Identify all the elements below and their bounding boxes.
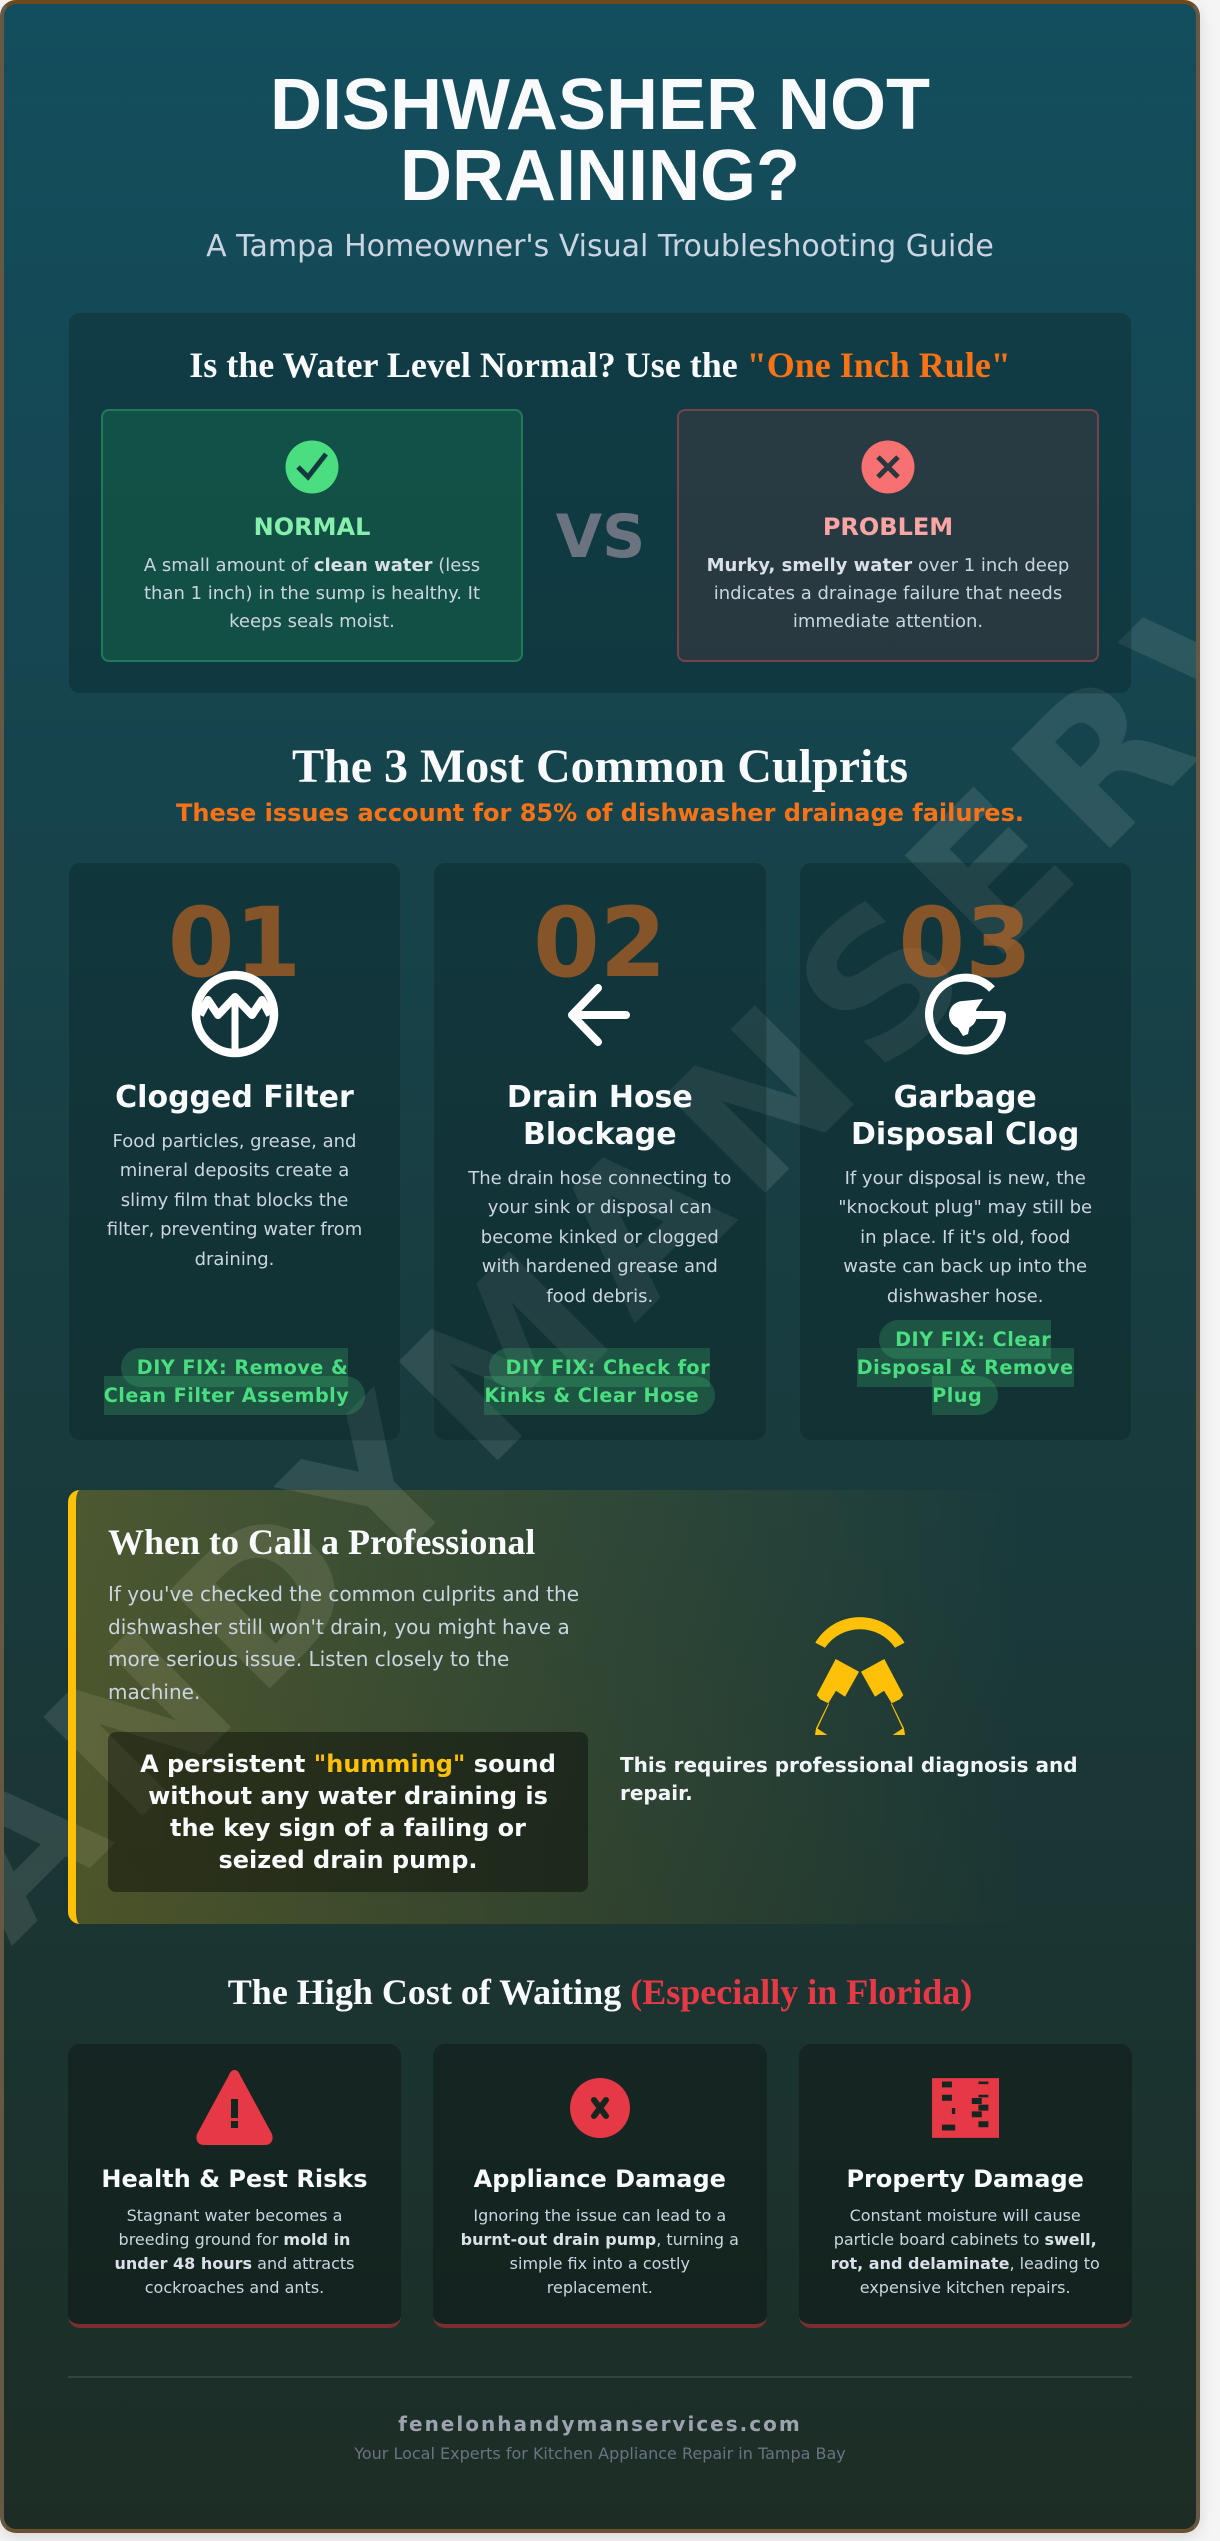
title: appliance: Appliance Damage: [474, 2165, 726, 2193]
text: professional diagnosis: repair.: [620, 1780, 693, 1804]
text: professional: dishwasher still won't drain, you might have a: [108, 1615, 570, 1639]
card: health risks: [68, 2044, 401, 2328]
diy fix: disposal: Plug: [932, 1384, 982, 1407]
callout text: A persistent "humming" sound: [140, 1750, 556, 1778]
text: clogged filter: [107, 1131, 362, 1270]
heading: one inch rule: Is the Water Level Normal? Use the "One Inch Rule": [189, 344, 1011, 384]
text: appliance: simple fix into a costly: [510, 2254, 690, 2273]
text: garbage disposal: [838, 1168, 1092, 1307]
text: appliance: Ignoring the issue can lead to a: [473, 2206, 726, 2225]
diy fix: filter: DIY FIX: Remove &: [137, 1356, 348, 1379]
text: health: Stagnant water becomes a: [127, 2206, 342, 2225]
text: property: particle board cabinets to swell,: [834, 2230, 1097, 2249]
heading: high cost: The High Cost of Waiting (Especially in Florida): [228, 1972, 972, 2012]
icon: damaged cabinet: [932, 2078, 999, 2138]
text: drain hose: your sink or disposal can: [488, 1197, 712, 1218]
title: clogged filter: Clogged Filter: [115, 1080, 354, 1115]
title: garbage disposal: Disposal Clog: [851, 1117, 1079, 1152]
text: problem description: indicates a drainage failure that needs: [714, 583, 1062, 604]
heading: culprits: The 3 Most Common Culprits: [292, 740, 908, 793]
diy fix: filter: [104, 1348, 365, 1415]
text: health: [114, 2206, 354, 2297]
title: health: Health & Pest Risks: [101, 2165, 368, 2193]
callout text: the key sign of a failing or: [170, 1814, 526, 1842]
title: [270, 65, 930, 216]
subheading: culprits: These issues account for 85% of dishwasher drainage failures.: [176, 799, 1024, 827]
number 02: 02: [533, 887, 667, 999]
text: garbage disposal: waste can back up into the: [843, 1256, 1087, 1277]
text: normal description: keeps seals moist.: [229, 611, 395, 632]
title: DISHWASHER NOT: [270, 65, 930, 145]
text: professional: machine.: [108, 1680, 200, 1704]
callout: humming sound: [108, 1732, 588, 1892]
text: clogged filter: slimy film that blocks the: [121, 1190, 348, 1211]
icon: filter: [192, 970, 278, 1058]
text: drain hose: food debris.: [546, 1286, 653, 1307]
diy fix: disposal: [857, 1320, 1074, 1415]
icon: disposal: [925, 974, 1006, 1055]
subtitle: A Tampa Homeowner's Visual Troubleshooting Guide: [206, 228, 994, 264]
icon: warning triangle: [196, 2070, 273, 2145]
icon: check: [286, 440, 338, 494]
text: property: [831, 2206, 1100, 2297]
text: professional diagnosis: This requires professional diagnosis and: [620, 1752, 1078, 1776]
text: drain hose: [468, 1168, 731, 1307]
text: problem description: Murky, smelly water over 1 inch deep: [707, 554, 1069, 576]
panel: one inch rule: [68, 312, 1132, 694]
icon: pump warning: [815, 1617, 905, 1735]
text: problem description: immediate attention.: [793, 611, 983, 632]
card: appliance damage: [433, 2044, 767, 2328]
title: property: Property Damage: [846, 2165, 1084, 2193]
diy fix: hose: Kinks & Clear Hose: [484, 1384, 699, 1407]
text: garbage disposal: "knockout plug" may still be: [838, 1197, 1092, 1218]
card: property damage: [799, 2044, 1132, 2328]
callout text: [140, 1750, 556, 1874]
text: normal description: [144, 554, 480, 632]
text: professional: [108, 1582, 579, 1704]
heading: professional: When to Call a Professional: [108, 1522, 535, 1562]
title: drain hose: Drain Hose: [507, 1080, 693, 1115]
label: normal: NORMAL: [254, 513, 370, 541]
text: garbage disposal: dishwasher hose.: [887, 1286, 1043, 1307]
text: property: expensive kitchen repairs.: [860, 2278, 1071, 2297]
diy fix: hose: [484, 1348, 715, 1415]
text: clogged filter: draining.: [195, 1249, 274, 1270]
text: normal description: than 1 inch) in the sump is healthy. It: [144, 583, 480, 604]
text: normal description: A small amount of clean water (less: [144, 554, 480, 576]
diy fix: disposal: Disposal & Remove: [857, 1356, 1074, 1379]
footer: website: fenelonhandymanservices.com: [398, 2412, 802, 2436]
text: professional: If you've checked the common culprits and the: [108, 1582, 579, 1606]
footer: tagline: Your Local Experts for Kitchen Appliance Repair in Tampa Bay: [354, 2444, 846, 2463]
icon: cross: [862, 440, 914, 494]
text: clogged filter: filter, preventing water from: [107, 1219, 362, 1240]
card: normal: [101, 409, 523, 662]
text: appliance: burnt-out drain pump, turning a: [461, 2230, 739, 2249]
title: garbage disposal: Garbage: [894, 1080, 1037, 1115]
text: problem description: [707, 554, 1069, 632]
text: property: rot, and delaminate, leading to: [831, 2254, 1100, 2273]
title: drain hose: Blockage: [523, 1117, 677, 1152]
text: drain hose: with hardened grease and: [482, 1256, 718, 1277]
label: problem: PROBLEM: [823, 513, 953, 541]
card: garbage disposal: [799, 862, 1132, 1441]
callout text: without any water draining is: [148, 1782, 548, 1810]
text: clogged filter: mineral deposits create a: [120, 1160, 349, 1181]
title: drain hose: [507, 1080, 693, 1152]
text: drain hose: The drain hose connecting to: [468, 1168, 731, 1189]
card: clogged filter: [68, 862, 401, 1441]
panel: when to call a professional: [68, 1490, 1132, 1924]
text: garbage disposal: in place. If it's old, food: [860, 1227, 1070, 1248]
diy fix: hose: DIY FIX: Check for: [505, 1356, 710, 1379]
diy fix: filter: Clean Filter Assembly: [104, 1384, 349, 1407]
number 03: 03: [898, 887, 1032, 999]
text: clogged filter: Food particles, grease, and: [113, 1131, 356, 1152]
vs label: VS: [556, 502, 645, 572]
text: professional: more serious issue. Listen closely to the: [108, 1647, 509, 1671]
text: health: cockroaches and ants.: [145, 2278, 324, 2297]
title: garbage disposal: [851, 1080, 1079, 1152]
text: property: Constant moisture will cause: [850, 2206, 1081, 2225]
text: garbage disposal: If your disposal is new, the: [845, 1168, 1086, 1189]
text: professional diagnosis: [620, 1752, 1078, 1804]
icon: x circle: [570, 2078, 630, 2138]
text: appliance: replacement.: [547, 2278, 653, 2297]
card: problem: [677, 409, 1099, 662]
text: drain hose: become kinked or clogged: [481, 1227, 719, 1248]
text: health: breeding ground for mold in: [119, 2230, 350, 2249]
callout text: seized drain pump.: [218, 1846, 478, 1874]
text: appliance: [461, 2206, 739, 2297]
footer divider: [68, 2376, 1132, 2378]
number 01: 01: [168, 887, 301, 999]
icon: arrow: [568, 984, 630, 1046]
text: health: under 48 hours and attracts: [114, 2254, 354, 2273]
title: DRAINING?: [400, 136, 800, 216]
diy fix: disposal: DIY FIX: Clear: [895, 1328, 1051, 1351]
card: drain hose: [433, 862, 767, 1441]
